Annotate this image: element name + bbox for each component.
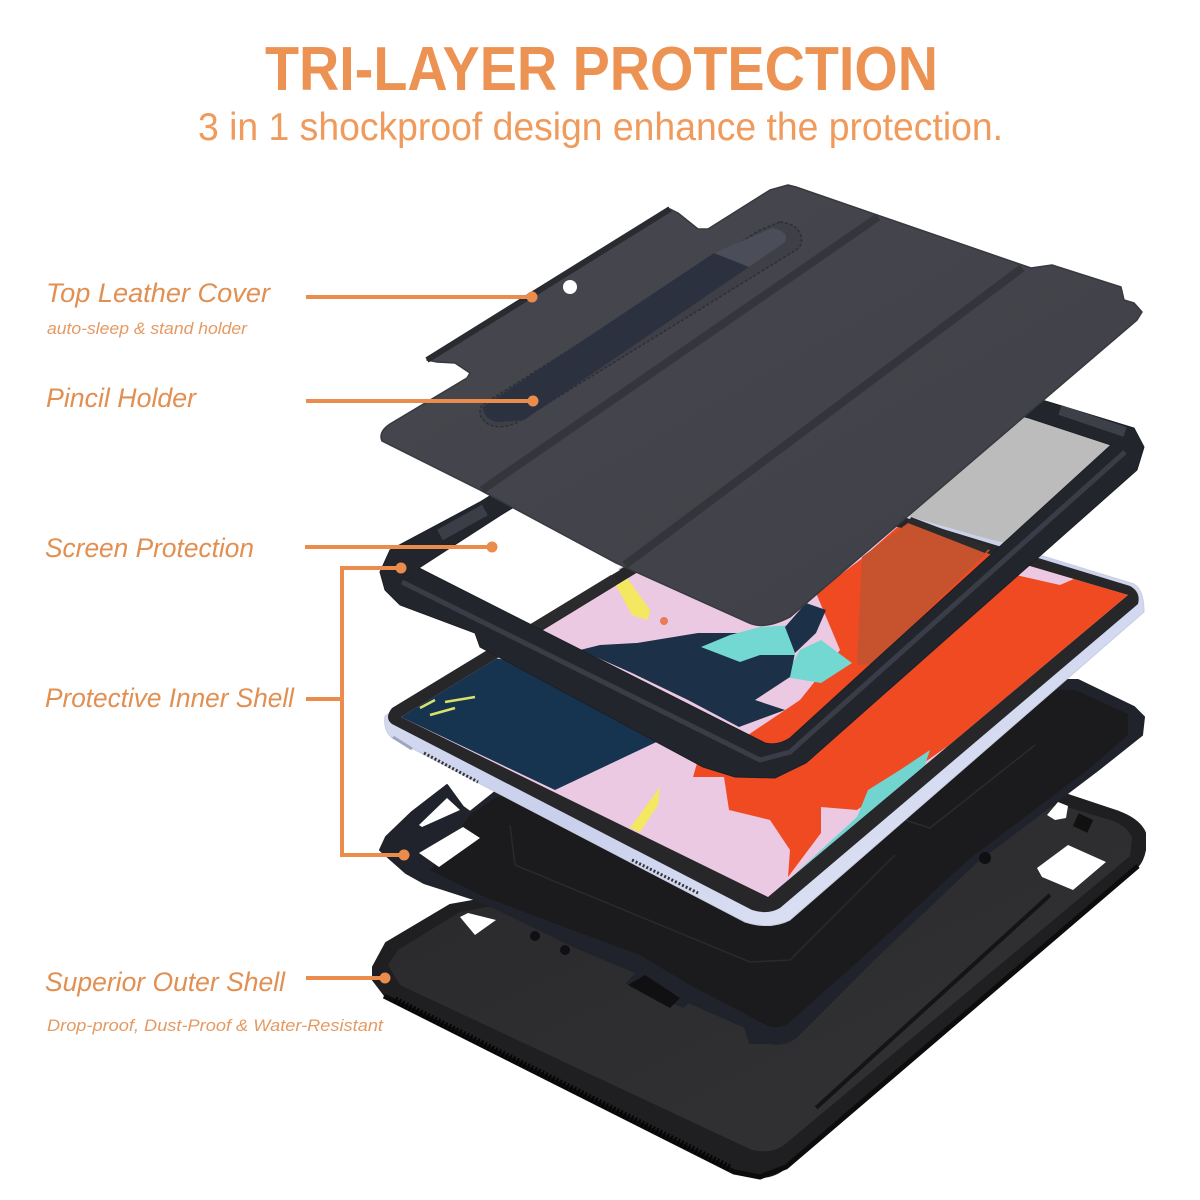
screen film: grey area [900,410,1111,543]
inner shell cut-outs [419,798,480,867]
title: TRI-LAYER PROTECTION [265,35,938,104]
callout: pencil holder [46,383,538,413]
camera hole [563,280,577,294]
fold lines [482,217,1022,565]
side rail [427,209,670,360]
bezel seen through film [529,517,990,631]
callout: pencil holder: Pincil Holder [46,383,197,413]
pencil holder [480,222,801,427]
callout: top leather cover: Top Leather Cover [46,278,271,308]
layer: iPad [385,473,1144,926]
inner shell clips [530,852,991,1008]
callout: top leather cover [46,278,538,338]
yellow splashes [616,578,650,620]
outer shell cut-outs [460,802,1106,935]
callout: top leather cover: auto-sleep & stand holder [47,319,248,338]
home edge button [393,737,412,749]
teal strokes [796,750,930,873]
callout: superior outer shell: Superior Outer Shell [45,967,286,997]
dark wing [785,603,826,653]
callout: screen protection [45,533,498,563]
film tint [857,523,990,665]
layer: top leather cover [381,185,1142,625]
navy creature [580,627,795,727]
screen film: white area [419,515,620,625]
callout: superior outer shell: Drop-proof, Dust-Proof & Water-Resistant [47,1016,384,1035]
iPad body [385,473,1144,926]
iPad bezel [388,477,1139,912]
callout: screen protection: Screen Protection [45,533,254,563]
screen artwork [401,515,1140,877]
subtitle: 3 in 1 shockproof design enhance the protection. [198,106,1003,149]
callout: superior outer shell [45,967,390,1035]
callout: protective inner shell [45,562,410,860]
teal eye [701,625,795,662]
layer: protective inner shell [380,680,1144,1044]
layer: superior outer shell [373,795,1145,1177]
iPad screen [401,490,1128,897]
layer: screen protection frame [380,320,1144,778]
speaker grilles [424,753,698,893]
callout: protective inner shell: Protective Inner Shell [45,683,295,713]
red paint [693,515,1140,877]
navy wash [401,657,667,790]
